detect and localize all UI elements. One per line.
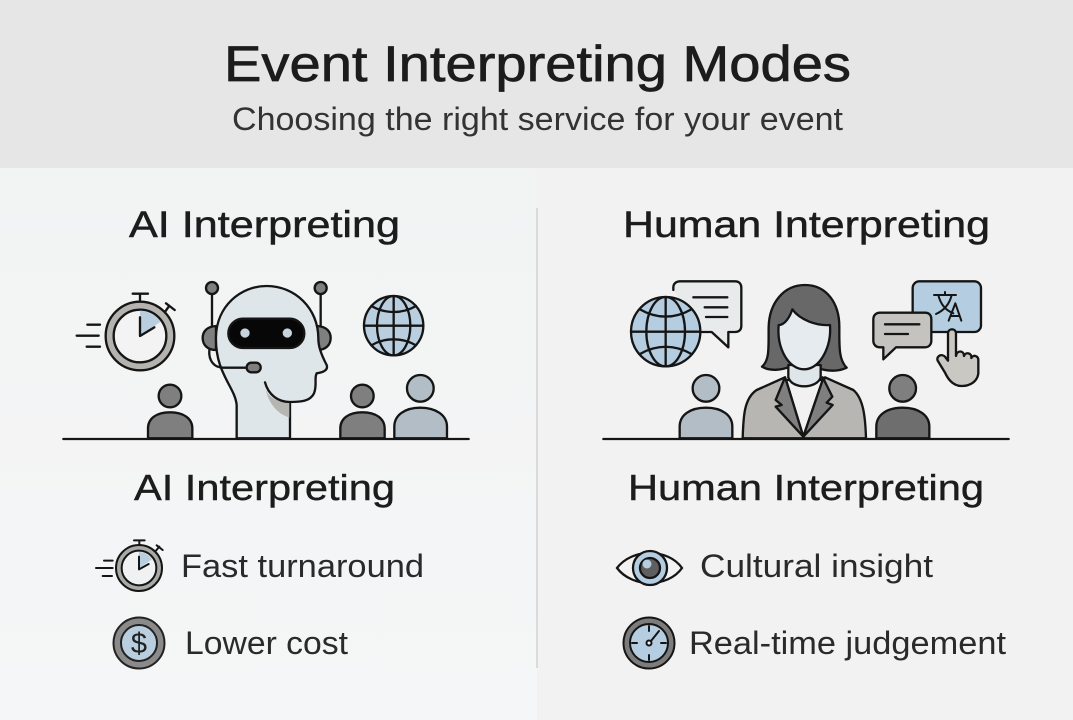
label: lower cost: Lower cost [185,625,348,661]
heading: Human Interpreting features: Human Interpreting [628,467,984,508]
icon: audience person middle [340,385,385,438]
icon: audience person left [680,375,732,438]
icon: dollar coin: $ [131,628,147,660]
feature: real-time judgement [624,618,1006,668]
icon: globe [364,296,423,355]
baseline [603,435,1009,442]
heading: AI Interpreting features: AI Interpreting [134,467,395,508]
illustration: AI robot scene [63,282,469,439]
icon: speech bubble small [873,313,931,359]
icon: dollar coin [114,618,164,668]
icon: audience person right [876,375,929,438]
icon: eye [617,551,682,585]
baseline [63,435,469,442]
illustration: human interpreter scene [603,281,1009,439]
heading: AI Interpreting: AI Interpreting [129,204,400,245]
feature: lower cost [114,618,348,668]
icon: translate bubble [913,281,981,332]
label: real-time judgement: Real-time judgement [689,625,1006,661]
heading: Human Interpreting: Human Interpreting [623,204,990,245]
icon: audience person left [148,385,192,438]
icon: gauge [624,618,674,668]
panel: AI interpreting [0,168,537,720]
icon: stopwatch [77,294,175,370]
feature: fast turnaround [96,540,424,591]
panel: header band [0,0,1073,168]
title: Event Interpreting Modes [224,36,851,92]
icon: audience person right [394,375,447,438]
icon: robot head [203,282,331,438]
icon: interpreter woman [743,285,866,438]
feature: cultural insight [617,548,933,585]
label: fast turnaround: Fast turnaround [181,548,424,584]
subtitle: Choosing the right service for your event [232,101,843,137]
label: cultural insight: Cultural insight [700,548,933,584]
panel: human interpreting [537,168,1073,720]
icon: pointing hand [937,329,978,386]
icon: small stopwatch [96,540,163,591]
icon: speech bubble [673,281,741,347]
icon: globe [631,297,700,366]
